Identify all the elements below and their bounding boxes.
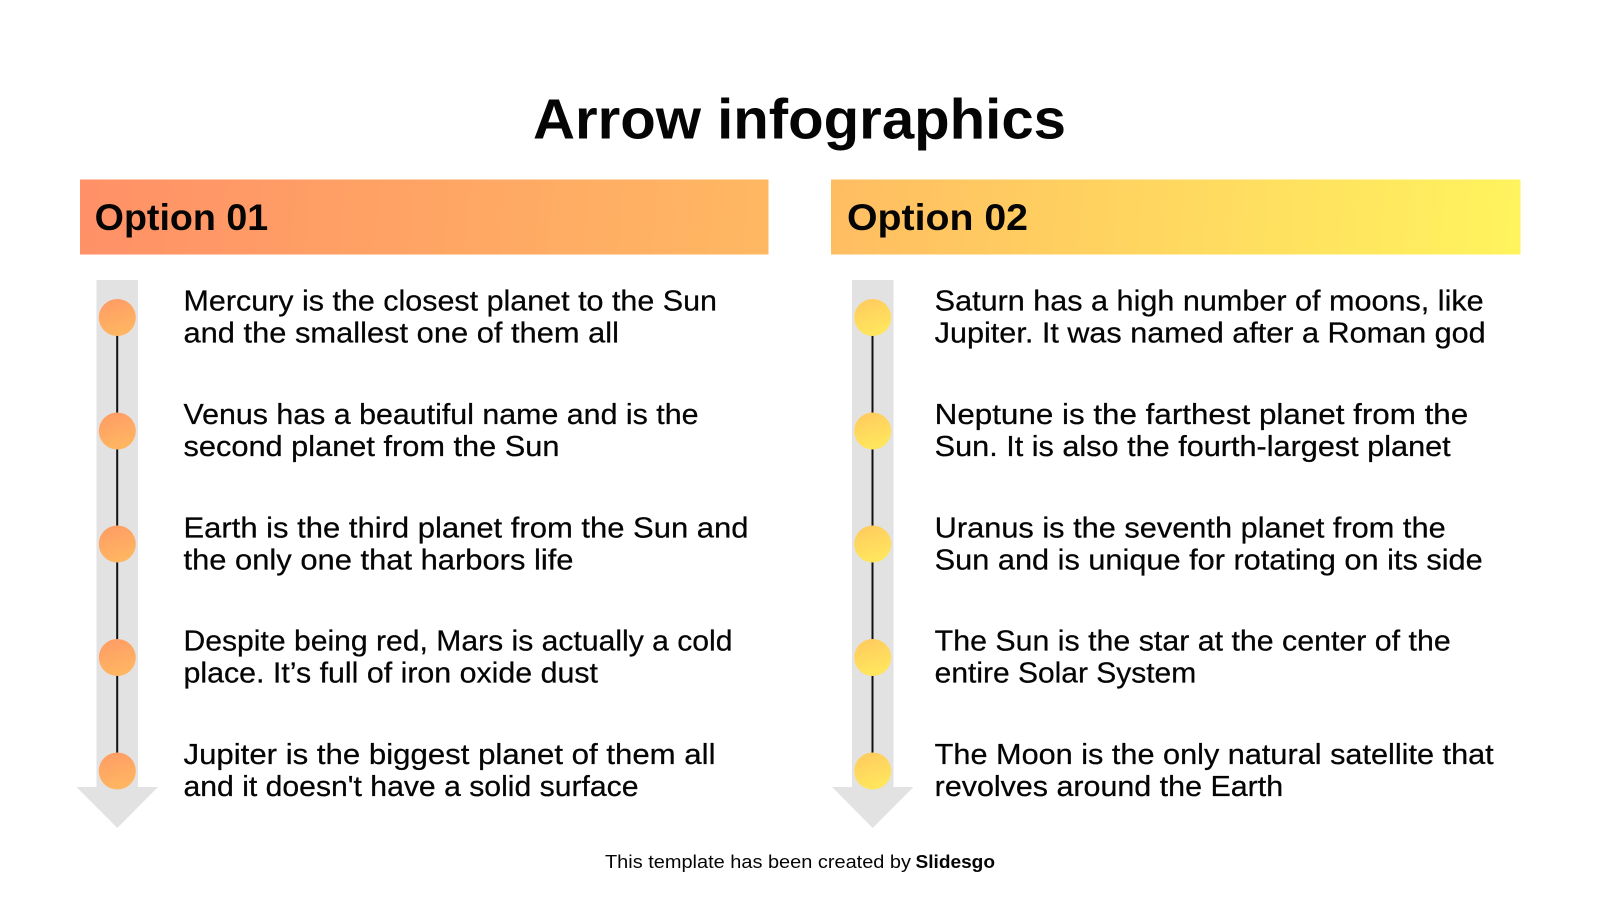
text: Mercury: Mercury is the closest planet to the Sun [184,286,717,318]
footer credit: This template has been created by [605,851,912,872]
text: Sun: The Sun is the star at the center of the [935,626,1451,658]
header band: option 02 [831,180,1520,254]
title: Arrow infographics [533,88,1066,152]
text: Moon [935,739,1494,803]
footer credit: Slidesgo [916,851,995,872]
text: Neptune: Neptune is the farthest planet from the [935,399,1468,431]
panel: option 02 [831,180,1520,828]
text: Saturn: Saturn has a high number of moons, like [935,286,1484,318]
arrow: option 01 timeline [76,280,158,828]
text: Venus: second planet from the Sun [184,431,560,463]
text: Mars: Despite being red, Mars is actually a cold [184,626,732,658]
text: Uranus: Sun and is unique for rotating on its side [935,544,1483,576]
text: Mars: place. It’s full of iron oxide dust [184,658,598,690]
text: Sun: entire Solar System [935,658,1196,690]
panel: option 01 [76,180,768,828]
text: Earth: the only one that harbors life [184,544,574,576]
text: Neptune [935,399,1468,463]
text: Moon: The Moon is the only natural satellite that [935,739,1494,771]
header band: option 01: Option 01 [95,197,268,238]
text: Jupiter: Jupiter is the biggest planet of them all [184,739,716,771]
text: Saturn [935,286,1486,350]
text: Moon: revolves around the Earth [935,771,1283,803]
header band: option 01 [80,180,768,254]
text: Earth: Earth is the third planet from the Sun and [184,512,748,544]
text: Uranus: Uranus is the seventh planet from the [935,512,1446,544]
text: Jupiter [184,739,716,803]
text: Saturn: Jupiter. It was named after a Roman god [935,318,1486,350]
arrow: option 02 timeline [832,280,914,828]
text: Jupiter: and it doesn't have a solid surface [184,771,638,803]
text: Mercury: and the smallest one of them all [184,318,619,350]
text: Uranus [935,512,1483,576]
text: Mercury [184,286,717,350]
text: Venus [184,399,698,463]
text: Neptune: Sun. It is also the fourth-largest planet [935,431,1451,463]
text: Earth [184,512,748,576]
header band: option 02: Option 02 [847,197,1028,238]
text: Venus: Venus has a beautiful name and is the [184,399,698,431]
text: Mars [184,626,732,690]
text: Sun [935,626,1451,690]
